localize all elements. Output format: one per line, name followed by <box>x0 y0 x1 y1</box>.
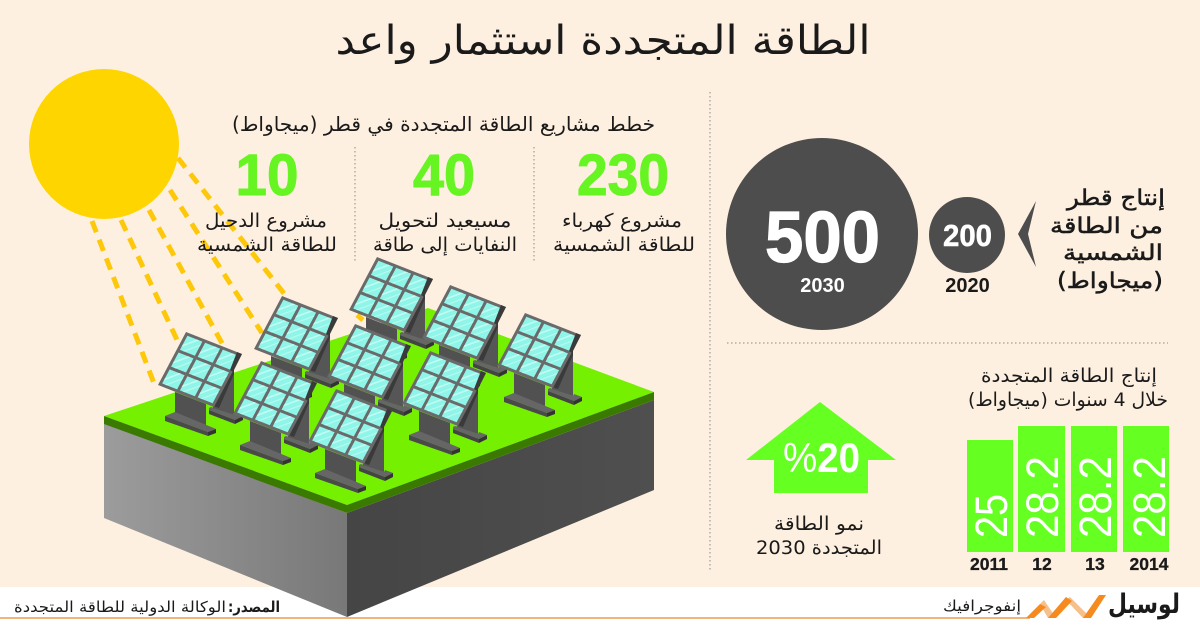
grass top <box>104 308 654 505</box>
heading: bar chart title: خلال 4 سنوات (ميجاواط) <box>968 389 1168 411</box>
stat: 40: النفايات إلى طاقة <box>373 234 517 257</box>
logo: Lusail infographic <box>943 589 1180 620</box>
heading: plans for renewable energy projects: خطط مشاريع الطاقة المتجددة في قطر (ميجاواط) <box>232 112 655 137</box>
stat: 230: للطاقة الشمسية <box>553 234 695 256</box>
circle: 2030 target 500: 2030 <box>800 275 845 297</box>
circle: 2020 value 200: 200 <box>943 218 992 253</box>
heading: bar chart title <box>968 365 1168 411</box>
text: Qatar solar energy production <box>1050 186 1165 294</box>
footer strip <box>0 587 1200 629</box>
icon: chevron pointer <box>1018 201 1036 267</box>
heading: bar chart title: إنتاج الطاقة المتجددة <box>981 365 1157 388</box>
circle: 2030 target 500 <box>726 138 918 330</box>
text: growth caption: المتجددة 2030 <box>756 537 882 559</box>
text: growth caption: نمو الطاقة <box>774 513 864 535</box>
text: Qatar solar energy production: الشمسية <box>1063 241 1163 266</box>
left face of the block <box>104 423 347 617</box>
icon: sun <box>29 69 179 219</box>
bar 2012 <box>1017 426 1068 574</box>
bar 2013: 13 <box>1085 554 1105 574</box>
bar 2011: 2011 <box>970 554 1008 574</box>
bar 2011 <box>966 440 1017 574</box>
arrow: 20% growth: %20 <box>783 434 860 481</box>
stat: 230: 230 <box>577 143 669 208</box>
bar 2012: 12 <box>1032 554 1052 574</box>
bar 2013 <box>1070 426 1121 574</box>
text: growth caption <box>756 513 882 559</box>
circle: 2020 value 200 <box>929 197 1005 297</box>
text: Qatar solar energy production: إنتاج قطر <box>1066 186 1165 211</box>
text: Qatar solar energy production: من الطاقة <box>1050 214 1163 239</box>
stat: 40: 40 <box>413 143 475 208</box>
stat: 10 <box>197 143 337 256</box>
title: الطاقة المتجددة استثمار واعد <box>336 18 870 64</box>
right face of the block <box>347 400 654 617</box>
stat: 10: مشروع الدحيل <box>205 210 327 232</box>
illustration: ground block with solar panels <box>104 257 654 617</box>
solar panel array <box>158 257 582 493</box>
bar chart: production over four years <box>966 426 1175 574</box>
logo: Lusail infographic: إنفوجرافيك <box>943 597 1021 615</box>
stat: 10: للطاقة الشمسية <box>197 234 337 256</box>
circle: 2030 target 500: 500 <box>765 198 880 278</box>
bar 2011: 25 <box>966 494 1017 538</box>
text: Qatar solar energy production: (ميجاواط) <box>1057 269 1163 294</box>
bar 2014: 2014 <box>1130 554 1169 574</box>
source line: المصدر: <box>228 598 280 616</box>
stat: 230 <box>553 143 695 256</box>
stat: 10: 10 <box>236 143 298 208</box>
bar 2013: 28.2 <box>1070 456 1121 538</box>
circle: 2020 value 200: 2020 <box>945 275 990 297</box>
stat: 230: مشروع كهرباء <box>562 210 682 232</box>
logo: Lusail infographic: لوسيل <box>1108 589 1180 620</box>
icon: sun rays <box>92 158 363 386</box>
bar 2014 <box>1123 426 1175 574</box>
stat: 40 <box>373 143 517 257</box>
bar 2012: 28.2 <box>1017 456 1068 538</box>
bar 2014: 28.2 <box>1124 456 1175 538</box>
stat: 40: مسيعيد لتحويل <box>378 210 512 232</box>
arrow: 20% growth <box>746 402 896 493</box>
source line: الوكالة الدولية للطاقة المتجددة <box>14 598 226 616</box>
